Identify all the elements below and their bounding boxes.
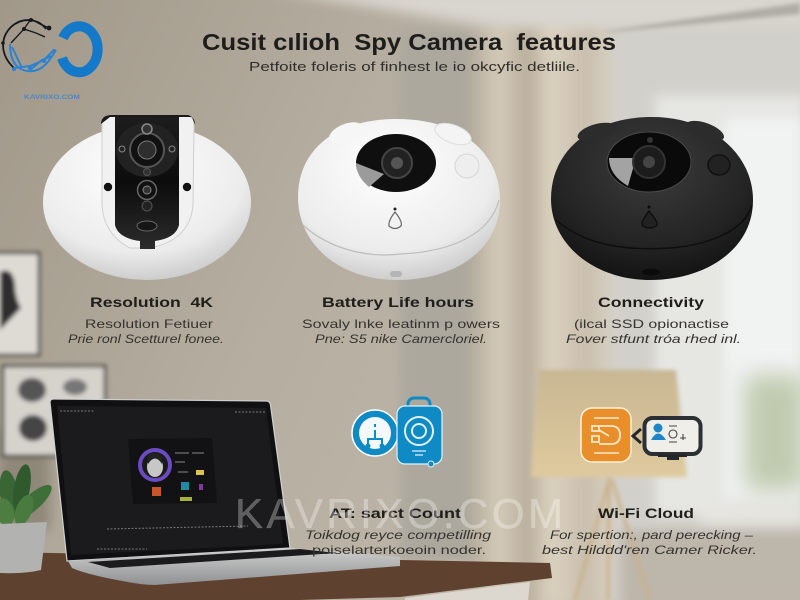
monitor user glyph xyxy=(654,424,662,432)
screen graphic xyxy=(128,438,217,504)
feature: Resolution 4K: Resolution 4K xyxy=(90,294,213,310)
feature: Connectivity: Fover stfunt tróa rhed inl. xyxy=(566,332,741,346)
camera: black dome xyxy=(551,117,753,280)
icon: orange panel xyxy=(581,408,631,462)
icon: blue circle tree xyxy=(352,410,398,456)
logo network arc xyxy=(1,18,56,71)
laptop lid xyxy=(50,399,290,561)
plant pot xyxy=(0,522,47,573)
laptop screen xyxy=(57,406,283,555)
plant xyxy=(0,463,56,573)
icon: monitor xyxy=(644,418,700,460)
feature: Resolution 4K: Prie ronl Scetturel fonee. xyxy=(68,332,224,346)
logo xyxy=(1,18,98,101)
feature: Resolution 4K: Resolution Fetiuer xyxy=(85,317,213,331)
feature: Wi-Fi Cloud: Wi-Fi Cloud xyxy=(598,505,694,521)
feature: Battery Life: Pne: S5 nike Camercloriel. xyxy=(315,332,487,346)
feature: Connectivity: Connectivity xyxy=(598,294,704,310)
wall picture frame bottom xyxy=(3,366,105,456)
logo ring xyxy=(62,26,98,72)
plant leaves xyxy=(0,463,56,528)
feature: Wi-Fi Cloud: For spertion:, pard perecking – xyxy=(550,528,753,542)
feature: Wi-Fi Cloud: best Hilddd'ren Camer Ricker. xyxy=(542,543,757,557)
laptop base xyxy=(68,548,400,585)
icon: blue luggage camera xyxy=(397,398,442,467)
feature: Wi-Fi Cloud xyxy=(542,505,757,557)
title: Cusit cılioh Spy Camera features xyxy=(202,29,616,55)
subtitle: Petfoite foleris of finhest le io okcyfic detliile. xyxy=(249,60,580,74)
feature: AI Smart Count: Toikdog reyce competilling xyxy=(305,528,491,542)
feature: Battery Life: Sovaly lnke leatinm p owers xyxy=(302,317,500,331)
laptop xyxy=(50,399,400,585)
feature: Resolution 4K xyxy=(68,294,224,346)
watermark: KAVRIXO.COM xyxy=(235,490,563,537)
feature: AI Smart Count xyxy=(305,505,491,557)
logo caption: KAVRIXO.COM xyxy=(24,94,80,101)
feature: Battery Life: Battery Life hours xyxy=(322,294,474,310)
lamp xyxy=(531,370,687,600)
feature: AI Smart Count: AT: sarct Count xyxy=(329,505,461,521)
camera: white wall-mount xyxy=(43,115,251,280)
arrow xyxy=(633,429,641,443)
feature: Connectivity xyxy=(566,294,741,346)
camera strip xyxy=(115,117,179,249)
desk xyxy=(0,552,552,600)
feature: AI Smart Count: poiselarterkoeoin noder. xyxy=(312,543,486,557)
wall picture frame top xyxy=(0,253,39,355)
feature: Battery Life xyxy=(302,294,500,346)
camera: white dome xyxy=(298,118,500,280)
feature: Connectivity: (ilcal SSD opionactise xyxy=(574,317,729,331)
